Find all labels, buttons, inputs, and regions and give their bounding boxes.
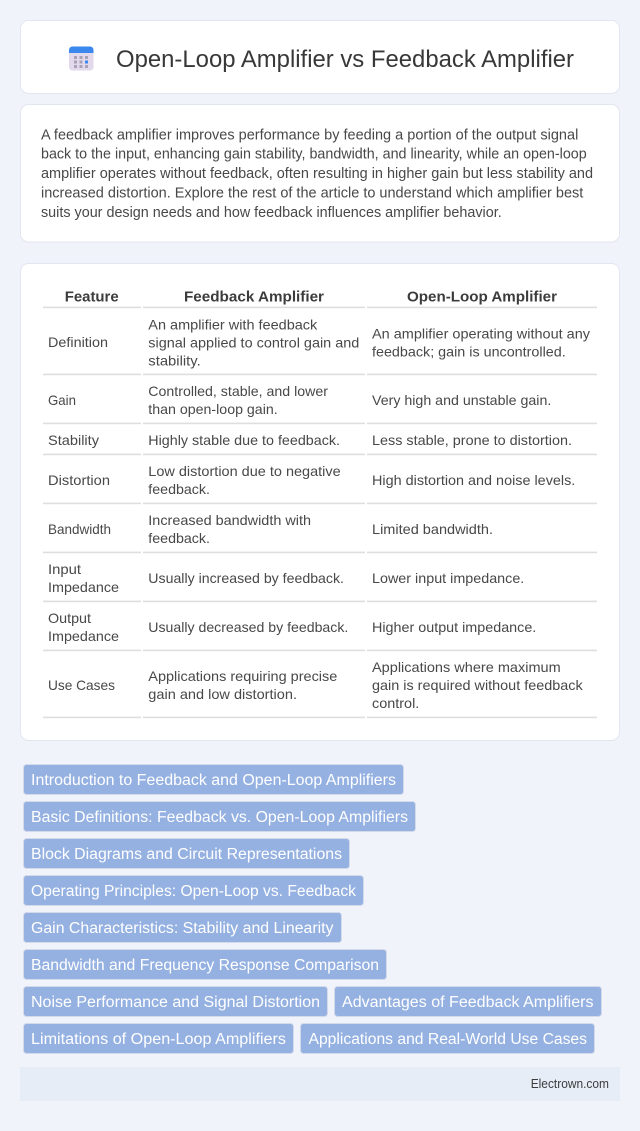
tag: limitations	[24, 1024, 294, 1054]
tag: advantages: Advantages of Feedback Amplifiers	[342, 994, 594, 1011]
row: output impedance: Higher output impedance.	[372, 619, 536, 635]
row: output impedance	[48, 610, 536, 644]
row: input impedance: Lower input impedance.	[372, 570, 524, 586]
row: gain: Controlled, stable, and lower	[148, 383, 328, 399]
footer: Electrown.com	[531, 1076, 609, 1091]
tag: applications: Applications and Real-World Use Cases	[308, 1031, 587, 1048]
row: use cases: Applications where maximum	[372, 659, 561, 675]
row: definition	[48, 316, 590, 368]
tag: noise performance: Noise Performance and Signal Distortion	[31, 994, 320, 1011]
table header row: Feedback Amplifier	[184, 289, 324, 306]
row: definition: An amplifier operating without any	[372, 325, 590, 341]
row: gain: Very high and unstable gain.	[372, 392, 551, 408]
row: bandwidth: Limited bandwidth.	[372, 521, 493, 537]
tag: operating principles: Operating Principles: Open-Loop vs. Feedback	[31, 883, 356, 900]
tag: limitations: Limitations of Open-Loop Amplifiers	[31, 1031, 286, 1048]
panel: introduction paragraph: amplifier operates without feedback, often resulting in higher gain but less stability and	[41, 166, 593, 182]
tag: introduction: Introduction to Feedback and Open-Loop Amplifiers	[31, 772, 396, 789]
row: distortion: High distortion and noise levels.	[372, 472, 575, 488]
row: stability: Highly stable due to feedback.	[148, 432, 340, 448]
panel: introduction paragraph: back to the input, enhancing gain stability, bandwidth, and linearity, while an open-loop	[41, 147, 587, 163]
footer	[20, 1067, 620, 1101]
row: use cases: gain is required without feedback	[372, 677, 584, 693]
row: gain: than open-loop gain.	[148, 401, 278, 417]
row: use cases: gain and low distortion.	[148, 686, 297, 702]
row: input impedance: Impedance	[48, 579, 119, 595]
icon: calendar grid	[69, 46, 94, 70]
row: gain	[48, 383, 551, 417]
row: distortion: Distortion	[48, 472, 110, 488]
title: Open-Loop Amplifier vs Feedback Amplifier	[116, 46, 574, 73]
row: input impedance: Usually increased by feedback.	[148, 570, 344, 586]
tag: introduction	[24, 764, 404, 794]
tag: block diagrams	[24, 838, 350, 868]
row: bandwidth: Bandwidth	[48, 521, 111, 537]
table header row: Open-Loop Amplifier	[407, 289, 557, 306]
row: output impedance: Impedance	[48, 628, 119, 644]
panel: introduction paragraph: suits your design needs and how feedback influences amplifier behavior.	[41, 205, 502, 221]
panel: introduction paragraph	[20, 104, 620, 242]
row: definition: signal applied to control gain and	[148, 334, 359, 350]
row: use cases: Use Cases	[48, 677, 115, 693]
row: distortion: Low distortion due to negative	[148, 463, 341, 479]
tag: advantages	[334, 986, 602, 1016]
row: use cases: Applications requiring precise	[148, 668, 338, 684]
row: bandwidth: Increased bandwidth with	[148, 512, 311, 528]
row: input impedance	[48, 561, 524, 595]
row: distortion	[48, 463, 575, 497]
tag: bandwidth and frequency: Bandwidth and Frequency Response Comparison	[31, 957, 379, 974]
table header row	[65, 289, 557, 306]
row: gain: Gain	[48, 392, 76, 408]
panel: introduction paragraph: increased distortion. Explore the rest of the article to understand which amplifier best	[41, 186, 583, 202]
panel: title header	[20, 20, 620, 94]
tag: basic definitions: Basic Definitions: Feedback vs. Open-Loop Amplifiers	[31, 809, 408, 826]
row: stability: Stability	[48, 432, 99, 448]
row: input impedance: Input	[48, 561, 81, 577]
row: definition: Definition	[48, 334, 108, 350]
tag: applications	[300, 1024, 594, 1054]
tag: gain characteristics: Gain Characteristics: Stability and Linearity	[31, 920, 334, 937]
row: use cases	[48, 659, 584, 711]
tag: noise performance	[24, 986, 328, 1016]
row: output impedance: Usually decreased by feedback.	[148, 619, 348, 635]
row: output impedance: Output	[48, 610, 91, 626]
tag: gain characteristics	[24, 912, 342, 942]
row: use cases: control.	[372, 695, 419, 711]
row: bandwidth	[48, 512, 493, 546]
panel: comparison table	[20, 264, 620, 740]
row: distortion: feedback.	[148, 481, 210, 497]
row: stability: Less stable, prone to distortion.	[372, 432, 572, 448]
panel: introduction paragraph: A feedback amplifier improves performance by feeding a portion of the output signal	[41, 127, 578, 143]
row: stability	[48, 432, 572, 448]
tag: bandwidth and frequency	[24, 950, 386, 980]
tag: basic definitions	[24, 802, 416, 832]
row: definition: feedback; gain is uncontrolled.	[372, 343, 566, 359]
tag: block diagrams: Block Diagrams and Circuit Representations	[31, 846, 342, 863]
panel: topic tags	[24, 764, 602, 1054]
tag: operating principles	[24, 876, 364, 906]
row: definition: stability.	[148, 352, 201, 368]
row: definition: An amplifier with feedback	[148, 316, 318, 332]
table header row: Feature	[65, 289, 119, 306]
row: bandwidth: feedback.	[148, 530, 210, 546]
